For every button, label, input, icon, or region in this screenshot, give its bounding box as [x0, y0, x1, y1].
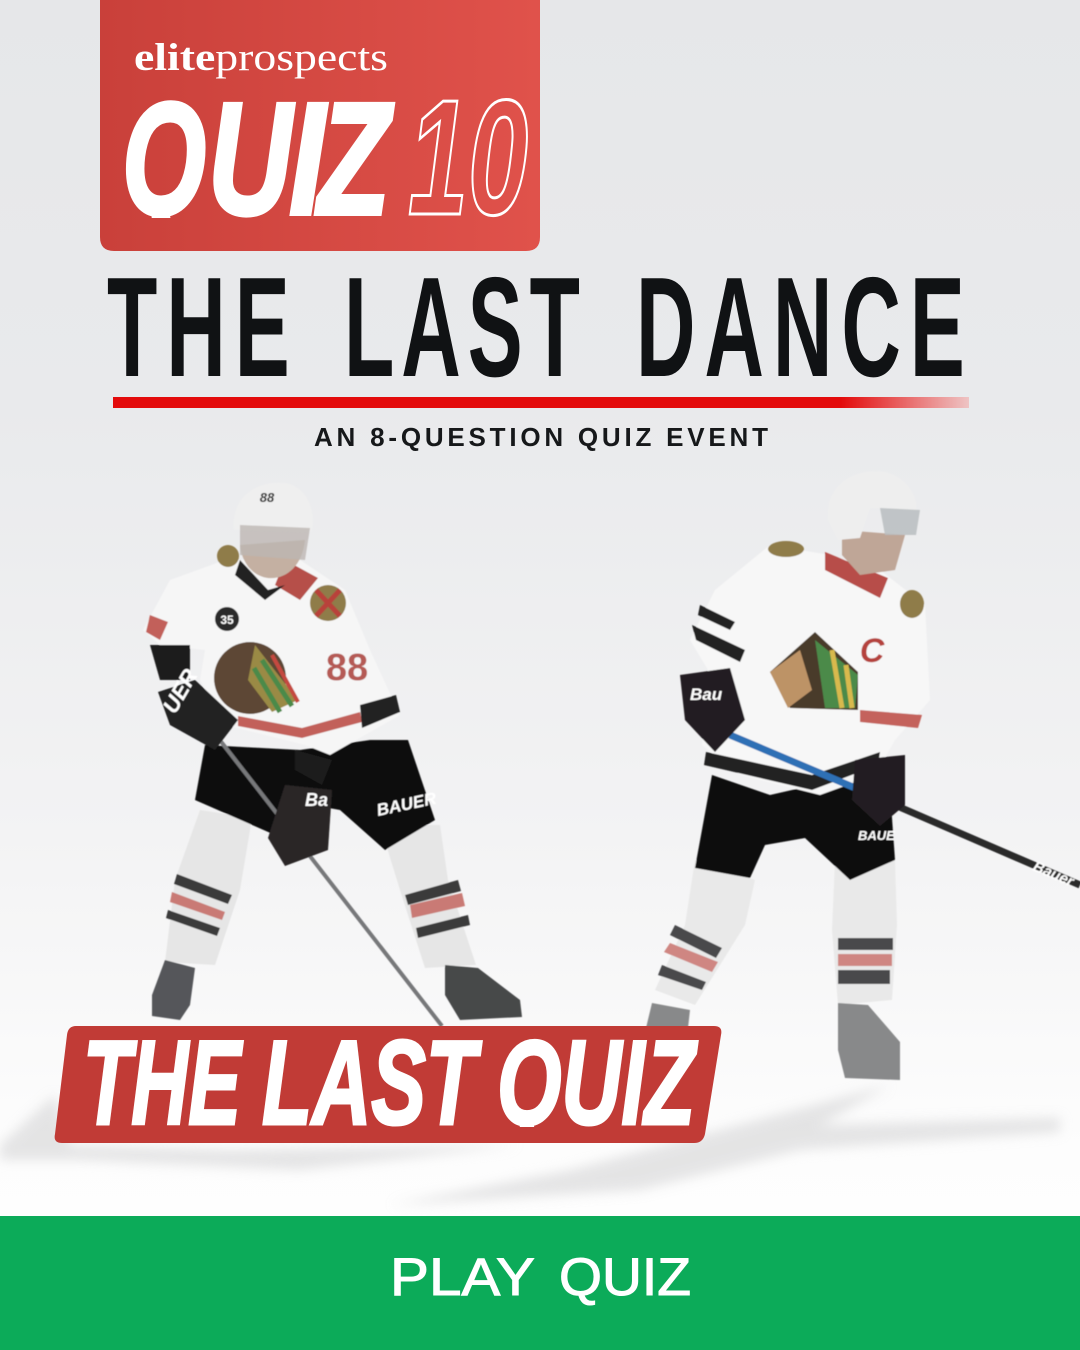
right skater jersey — [690, 545, 930, 795]
button label: PLAY — [390, 1248, 535, 1307]
button label: QUIZ — [559, 1248, 691, 1307]
left skater shoulder patch — [217, 545, 346, 621]
quiz word: U — [208, 69, 295, 248]
left skater memorial patch — [215, 607, 239, 631]
banner text: QUIZ — [497, 1016, 698, 1150]
right skater stick — [730, 735, 1080, 891]
right skater captain letter: C — [860, 632, 885, 670]
left skater crest — [214, 642, 298, 714]
right skater shoulder patches — [768, 541, 924, 618]
brand logo: elite prospects — [134, 36, 388, 79]
left skater jersey — [143, 560, 400, 755]
left skater sleeve number: 88 — [326, 647, 368, 689]
quiz word: Q — [122, 69, 206, 248]
title — [107, 248, 974, 407]
left skater legs — [165, 810, 476, 968]
left skater head: 88 — [260, 490, 275, 505]
button label — [390, 1248, 691, 1307]
player: right skater — [646, 471, 1080, 1080]
banner text — [87, 1038, 699, 1127]
banner text: THE — [83, 1016, 244, 1150]
left skater shorts logo: BAUER — [375, 789, 439, 820]
left skater gloves: Ba — [305, 790, 328, 810]
quiz badge — [100, 0, 540, 251]
quiz number: 10 — [408, 66, 528, 249]
ice shadows — [0, 1085, 1060, 1205]
left skater skates — [152, 960, 522, 1020]
title: DANCE — [636, 248, 974, 407]
left skater gloves: UER — [158, 665, 203, 718]
red rule — [113, 397, 969, 408]
title: THE — [107, 248, 299, 407]
right skater legs — [655, 860, 897, 1005]
left skater gloves — [158, 665, 332, 866]
left skater shorts — [195, 740, 435, 850]
right skater stick: Bauer — [1030, 858, 1077, 891]
last quiz banner — [54, 1026, 722, 1143]
right skater skates — [646, 1003, 900, 1080]
left skater memorial patch: 35 — [220, 613, 234, 627]
player: left skater — [143, 483, 522, 1026]
title: LAST — [344, 248, 587, 407]
quiz word: Z — [315, 69, 394, 248]
right skater gloves: Bau — [690, 685, 723, 704]
right skater gloves — [680, 668, 905, 826]
right skater crest — [770, 632, 858, 710]
left skater head — [234, 483, 313, 578]
right skater shorts logo: BAUE — [858, 828, 895, 843]
right skater head — [828, 471, 920, 575]
left skater stick — [212, 730, 442, 1026]
subtitle: AN 8-QUESTION QUIZ EVENT — [314, 422, 768, 452]
right skater shorts — [695, 775, 895, 880]
quiz word: I — [289, 69, 328, 248]
quiz word — [126, 100, 396, 218]
banner text: LAST — [262, 1016, 482, 1150]
play quiz button — [0, 1216, 1080, 1350]
